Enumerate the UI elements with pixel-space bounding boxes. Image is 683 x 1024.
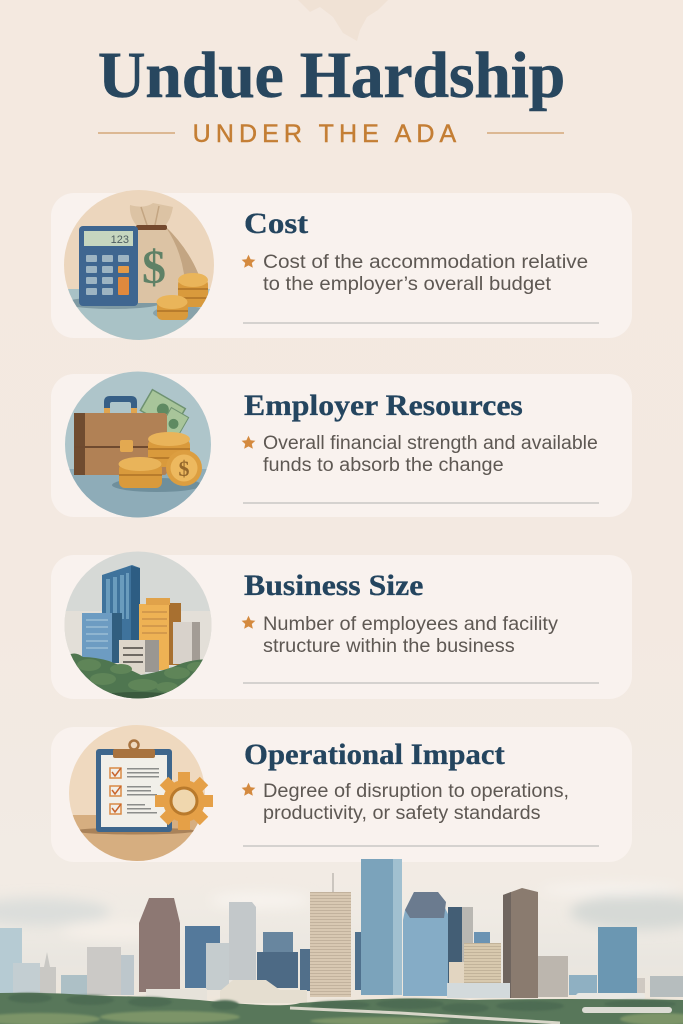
icon: star [242, 616, 256, 629]
title: Undue Hardship [98, 39, 565, 112]
icon: calculator, money bag and coins: $ [142, 241, 166, 294]
text: business size description: structure within the business [263, 636, 515, 657]
panel: business size [51, 555, 632, 699]
text: operational impact description: productivity, or safety standards [263, 803, 541, 824]
icon: office buildings [64, 552, 212, 698]
text: employer resources description: funds to absorb the change [263, 455, 504, 476]
subtitle: under the ADA: UNDER THE ADA [193, 120, 461, 148]
icon: calculator, money bag and coins [64, 190, 214, 340]
map silhouette [298, 0, 388, 40]
text: business size description [263, 614, 558, 657]
panel: cost [51, 193, 632, 338]
icon: briefcase with cash and coins: $ [178, 456, 190, 481]
icon: star [242, 436, 256, 449]
text: cost description [263, 252, 588, 295]
panel: operational impact [51, 727, 632, 862]
text: cost description: Cost of the accommodation relative [263, 252, 588, 273]
panel: employer resources [51, 374, 632, 517]
text: cost description: to the employer’s overall budget [263, 274, 551, 295]
text: operational impact description: Degree of disruption to operations, [263, 781, 569, 802]
heading: employer resources: Employer Resources [244, 389, 523, 422]
skyline illustration [0, 859, 683, 1024]
heading: cost: Cost [244, 207, 308, 240]
tree line [0, 993, 683, 1024]
icon: star [242, 782, 256, 796]
icon: clipboard checklist and gear [69, 725, 213, 861]
text: operational impact description [263, 781, 569, 824]
icon: star [242, 254, 256, 268]
heading: business size: Business Size [244, 569, 423, 602]
icon: briefcase with cash and coins [65, 372, 211, 518]
icon: calculator, money bag and coins: 123 [111, 234, 129, 246]
text: business size description: Number of employees and facility [263, 614, 558, 635]
text: employer resources description: Overall financial strength and available [263, 433, 598, 454]
heading: operational impact: Operational Impact [244, 738, 505, 771]
text: employer resources description [263, 433, 598, 476]
